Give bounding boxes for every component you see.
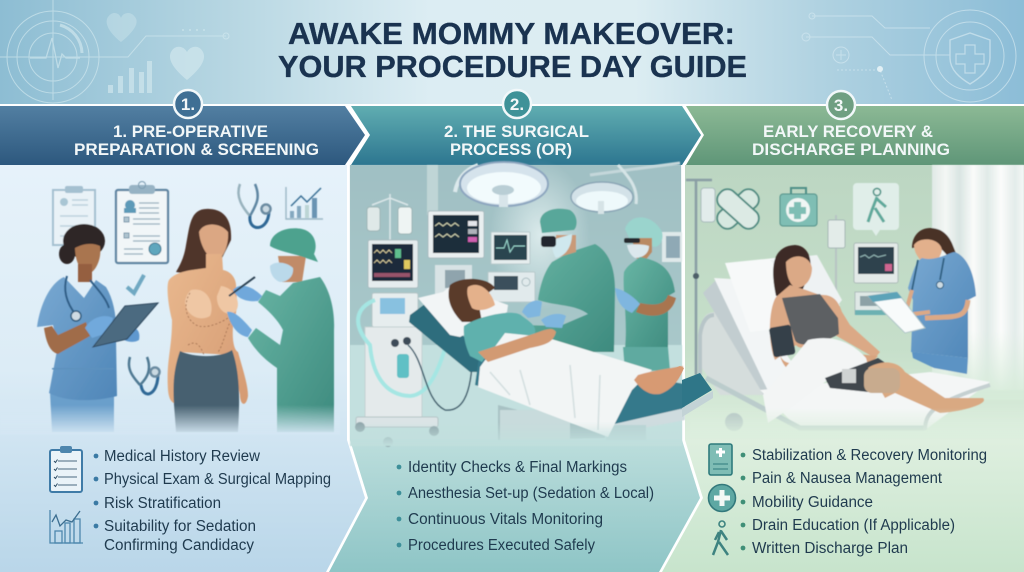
bullet list: surgical process: Continuous Vitals Monitoring [408,511,603,528]
IV bags [367,194,412,240]
bullet list: pre-operative: Risk Stratification [104,495,221,512]
decoration: medical heartbeat motif left [0,0,229,103]
bullet list: early recovery: Stabilization & Recovery Monitoring [752,447,987,464]
bullet list: early recovery: Pain & Nausea Management [752,470,943,487]
hospital bed [700,255,990,431]
figure: recovering patient [763,245,984,423]
icon: first aid kit [780,188,817,226]
icon: chart small [50,510,83,543]
bullet list: early recovery: Mobility Guidance [752,494,873,511]
step badge 1: 1. [181,95,195,114]
figure: nurse with tablet [37,224,158,432]
equipment stack [435,232,682,302]
header banner [0,0,1024,104]
icon: checklist clipboard small [50,446,82,492]
panel: step 2 ribbon: PROCESS (OR) [450,140,572,159]
decoration: hearts and bars left [107,13,204,93]
decoration: shield motif right [802,10,1016,102]
title: AWAKE MOMMY MAKEOVER: [288,16,735,51]
icon: plus circle [708,484,736,512]
bullet list: pre-operative: Suitability for Sedation [104,518,256,535]
figure: nurse [615,217,676,372]
bullet list: pre-operative: Confirming Candidacy [104,537,254,554]
step badge 3: 3. [834,96,848,115]
patient monitor large [428,211,484,258]
icon: stethoscope lower [129,357,160,394]
title [278,16,747,84]
bullet list: early recovery: Written Discharge Plan [752,540,908,557]
icon: clipboard checklist [116,182,168,263]
equipment and vitals monitor [828,215,900,315]
panel: step 2 ribbon [351,106,701,165]
illustration: pre-op consultation [0,182,340,435]
figure: patient [448,279,683,437]
bullet list: early recovery: Drain Education (If Applicable) [752,517,955,534]
IV pole [686,180,715,375]
title: YOUR PROCEDURE DAY GUIDE [278,49,747,84]
bullet list: surgical process: Identity Checks & Final Markings [408,459,627,476]
figure: surgeon [520,209,615,352]
panel: step 3 ribbon [686,106,1024,165]
operating table [409,304,685,440]
step badge 2: 2. [510,95,524,114]
step badge 1 [174,90,202,118]
bullet list: surgical process: Procedures Executed Safely [408,537,595,554]
icon: check mark [127,275,144,293]
icon: stethoscope top [238,184,270,228]
anesthesia machine [355,293,472,447]
icon: growth chart [286,187,323,219]
patient monitor left [368,240,418,288]
bullet list: pre-operative: Physical Exam & Surgical Mapping [104,471,331,488]
bullet list: surgical process [397,459,654,554]
panel: surgical process [329,160,700,572]
pillow [418,285,508,337]
figure: patient with surgical markings [168,209,248,432]
icon: medical chart book [709,444,732,475]
figure: surgeon marking patient [227,228,334,432]
bullet list: early recovery [741,447,987,557]
icon: faint clipboard [53,186,95,245]
panel: step 1 ribbon: 1. PRE-OPERATIVE [113,122,268,141]
icon: bandage [713,186,763,232]
panel: step 2 ribbon: 2. THE SURGICAL [444,122,589,141]
illustration: recovery room [686,165,1024,438]
figure: nurse with discharge plan [868,228,976,374]
window curtain [932,165,1024,390]
panel: step 1 ribbon: PREPARATION & SCREENING [74,140,319,159]
panel: step 1 ribbon [0,106,365,165]
ECG monitor [491,232,530,264]
icon: walking guidance card [853,183,899,236]
bullet list: surgical process: Anesthesia Set-up (Sedation & Local) [408,485,654,502]
surgical lights [455,162,680,214]
panel: pre-operative [0,165,365,572]
bullet list: pre-operative: Medical History Review [104,448,261,465]
step badge 3 [827,91,855,119]
icon: walking person [713,521,728,555]
illustration: operating room [350,160,685,447]
panel: step 3 ribbon: DISCHARGE PLANNING [752,140,950,159]
panel: step 3 ribbon: EARLY RECOVERY & [763,122,933,141]
bullet list: pre-operative [94,448,331,554]
step badge 2 [503,90,531,118]
operating table foot overlapping panel 3 [650,366,713,417]
panel: early recovery [662,165,1024,572]
